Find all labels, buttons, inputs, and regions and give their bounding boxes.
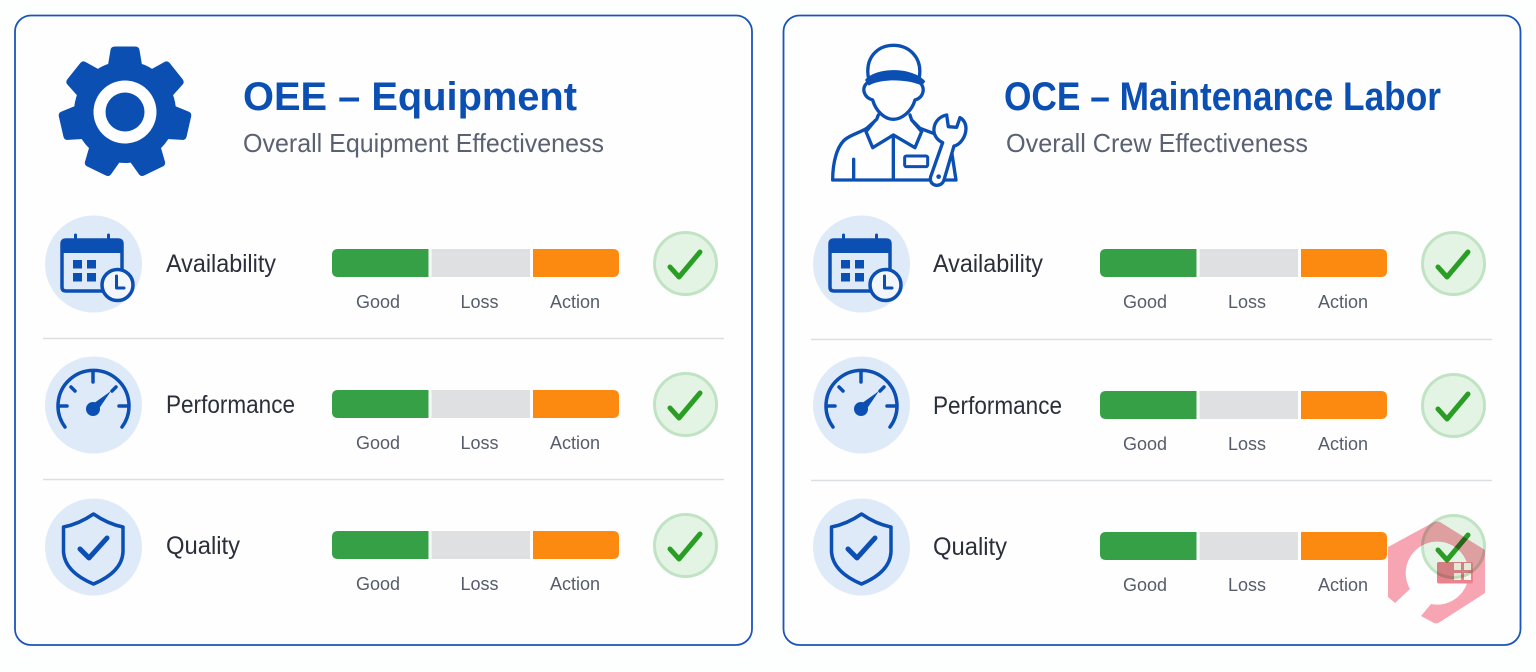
status bar	[1100, 249, 1387, 312]
status check	[654, 374, 716, 436]
status bar: Action	[1318, 434, 1368, 454]
icon: gear	[57, 46, 193, 178]
status bar: Good	[1123, 292, 1167, 312]
label: performance: Performance	[933, 392, 1062, 420]
heading: OEE: OEE – Equipment	[243, 75, 577, 119]
row: performance	[813, 356, 1484, 454]
label: availability: Availability	[166, 250, 276, 278]
row: performance	[45, 356, 716, 454]
icon: calendar with clock	[45, 216, 142, 312]
status bar: Action	[1318, 575, 1368, 595]
status bar: Action	[550, 574, 600, 594]
icon: shield	[45, 498, 142, 596]
row: availability	[45, 216, 716, 312]
icon: gauge	[45, 356, 142, 454]
status bar: Good	[356, 574, 400, 594]
status bar: Loss	[1228, 292, 1266, 312]
heading: OCE: OCE – Maintenance Labor	[1004, 75, 1441, 119]
status bar	[332, 531, 619, 594]
status bar: Action	[550, 292, 600, 312]
label: performance: Performance	[166, 391, 295, 419]
icon: calendar with clock	[813, 216, 910, 312]
row: availability	[813, 216, 1484, 312]
row: quality	[45, 498, 716, 596]
row: quality	[813, 498, 1484, 596]
status bar	[332, 390, 619, 453]
status bar	[1100, 391, 1387, 454]
label: quality: Quality	[933, 533, 1007, 561]
icon: gauge	[813, 356, 910, 454]
status bar: Good	[356, 292, 400, 312]
status bar: Good	[356, 433, 400, 453]
label: quality: Quality	[166, 532, 240, 560]
status bar: Loss	[460, 292, 499, 312]
panel: OCE maintenance labor	[784, 16, 1520, 645]
subheading: OEE: Overall Equipment Effectiveness	[243, 128, 604, 158]
status bar: Loss	[460, 574, 499, 594]
subheading: OCE: Overall Crew Effectiveness	[1006, 128, 1308, 158]
status check	[1422, 232, 1484, 294]
status check	[654, 232, 716, 294]
status bar: Good	[1123, 575, 1167, 595]
status check	[654, 514, 716, 576]
status bar: Loss	[1228, 434, 1266, 454]
panel: OEE equipment	[15, 16, 752, 645]
status bar: Good	[1123, 434, 1167, 454]
icon: maintenance worker with wrench	[833, 45, 966, 185]
status bar: Action	[1318, 292, 1368, 312]
status check	[1422, 516, 1484, 578]
status bar: Loss	[1228, 575, 1266, 595]
icon: shield	[813, 498, 910, 596]
status bar	[1100, 532, 1387, 595]
status bar: Loss	[460, 433, 499, 453]
watermark badge	[1388, 522, 1485, 623]
status check	[1422, 374, 1484, 436]
status bar	[332, 249, 619, 312]
status bar: Action	[550, 433, 600, 453]
label: availability: Availability	[933, 250, 1043, 278]
